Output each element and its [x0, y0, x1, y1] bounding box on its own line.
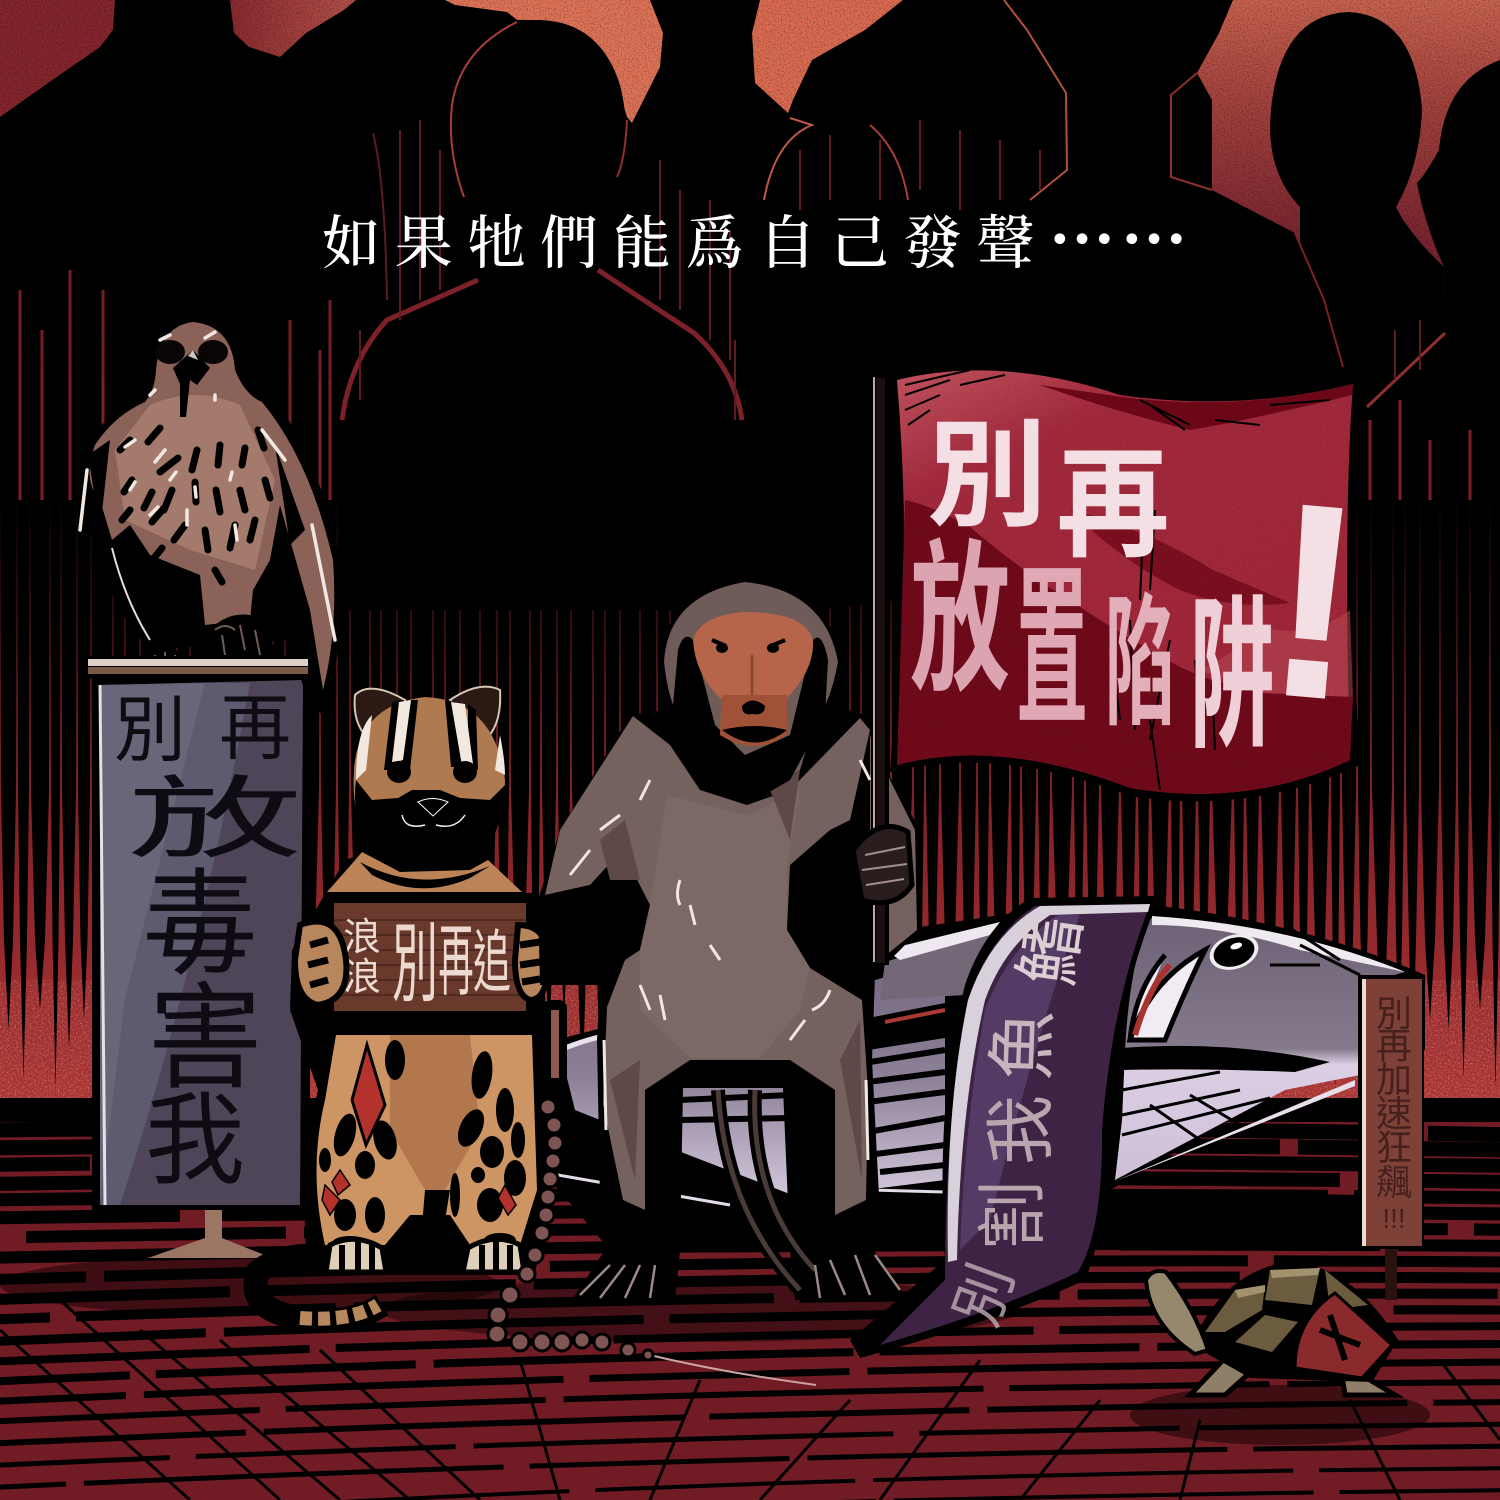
eagle banner text: 再 [219, 689, 291, 769]
leopard eyes and nose [387, 761, 411, 783]
floor shadows [1130, 1385, 1430, 1445]
flag scratch marks [905, 370, 1330, 430]
sash text: 鰭 [1007, 910, 1094, 990]
eagle belly rim [112, 548, 150, 640]
flag text: 別 [927, 411, 1047, 542]
sign text: 別 [392, 915, 438, 1013]
flag text: 陷 [1105, 583, 1175, 743]
monkey feet claws [580, 1255, 900, 1298]
leopard shoulders [327, 852, 522, 892]
eagle feather marks [120, 428, 270, 582]
leopard paws [295, 922, 548, 1005]
leopard spots [319, 1040, 526, 1250]
monkey tails [718, 1090, 800, 1290]
flag pole [871, 375, 889, 965]
sign text [343, 915, 511, 1013]
flag text: 置 [1016, 554, 1088, 747]
title ellipsis: …… [1049, 185, 1193, 258]
eagle banner text [114, 689, 302, 1197]
leopard head [354, 697, 505, 870]
fish head [1115, 918, 1405, 1180]
sign text [1376, 993, 1412, 1234]
sash text: 我 [982, 1095, 1060, 1165]
sign text: 浪 [343, 917, 381, 959]
monkey face [693, 612, 813, 745]
fish [535, 900, 1425, 1250]
floor hatching [0, 1126, 1500, 1500]
sign text: 再 [1376, 1025, 1412, 1066]
background wall with drips [0, 0, 1500, 1130]
eagle banner text: 毒 [142, 861, 258, 989]
monkey lower arm [545, 885, 590, 982]
leopard feet [326, 1239, 524, 1272]
fish eye [1205, 928, 1263, 976]
eagle dark wing areas [88, 440, 305, 545]
eagle outline [81, 318, 341, 720]
sign text: 浪 [343, 957, 381, 999]
monkey fur highlights [570, 760, 870, 1160]
sash text: 魚 [983, 1009, 1063, 1081]
leopard ears [355, 687, 500, 740]
flag shadow bands [1040, 384, 1353, 430]
flag text: 再 [1057, 437, 1169, 572]
sash shape [850, 896, 1160, 1358]
wooden sign on fish [1358, 975, 1424, 1300]
clouded leopard [256, 687, 548, 1320]
sign text: 速 [1376, 1093, 1412, 1134]
flag text [910, 411, 1374, 768]
leopard stripes [384, 700, 478, 770]
sash text: 割 [974, 1180, 1052, 1250]
sash text [943, 910, 1094, 1334]
chain [488, 1000, 816, 1385]
sign text: 再 [438, 917, 474, 1005]
flag text: 放 [910, 528, 1010, 712]
monkey hand [853, 826, 912, 903]
monkey outline [538, 577, 920, 1300]
turtle [1146, 1262, 1398, 1395]
eagle banner text: 放 [128, 769, 302, 869]
flag text: ! [1255, 442, 1374, 760]
silhouette heads and shoulders [340, 12, 1500, 620]
fish gill [1130, 950, 1205, 1040]
monkey right arm fur [870, 735, 917, 960]
fish sash banner [850, 896, 1160, 1358]
title: 如果牠們能爲自己發聲 [322, 211, 1049, 276]
eagle banner text: 別 [114, 691, 186, 771]
sign text: 追 [473, 924, 511, 1001]
fish silhouette [535, 900, 1425, 1250]
lit sky between silhouettes [0, 0, 1500, 380]
eagle banner text: 我 [145, 1085, 245, 1197]
eagle eyes and beak [155, 340, 185, 364]
sign text: 狂 [1376, 1127, 1412, 1168]
monkey fur body [545, 716, 870, 1215]
eagle banner [92, 678, 310, 1258]
leopard tail [256, 1255, 382, 1320]
turtle shell [1192, 1262, 1398, 1382]
leopard sign [328, 893, 536, 1021]
leopard torso [316, 1035, 537, 1245]
turtle wound [1295, 1293, 1392, 1378]
sign text: 加 [1376, 1059, 1412, 1100]
floor [0, 1098, 1500, 1500]
sign text: !!! [1382, 1203, 1406, 1234]
turtle head [1146, 1271, 1208, 1354]
leopard body [290, 850, 548, 1275]
eagle banner text: 害 [147, 975, 263, 1103]
turtle feet [1190, 1358, 1395, 1395]
macaque monkey [538, 375, 920, 1300]
flag text: 阱 [1190, 583, 1274, 768]
eagle perch [85, 656, 311, 678]
sign text: 飆 [1376, 1162, 1412, 1203]
silhouette rim lights [342, 0, 1445, 420]
fish rear body [560, 960, 945, 1198]
leopard wound [352, 1045, 385, 1145]
monkey head fur [664, 582, 838, 803]
eagle plumage [90, 322, 334, 690]
eagle [80, 318, 341, 720]
sign text: 別 [1376, 993, 1412, 1034]
sash text: 別 [943, 1255, 1026, 1334]
flag [890, 361, 1374, 805]
eagle talons [147, 614, 275, 680]
